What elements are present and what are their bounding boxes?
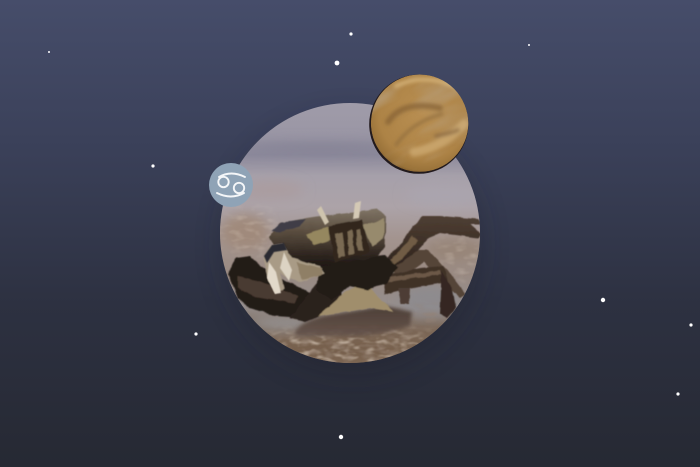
right legs	[392, 250, 466, 298]
wet reflection	[294, 306, 412, 336]
rear left claw	[228, 256, 318, 318]
crab photo circle	[215, 103, 485, 365]
sand speckle, lower and side areas	[230, 213, 272, 250]
claw highlights and eye stalks	[264, 201, 361, 294]
carapace	[269, 209, 386, 266]
planet: Venus	[369, 74, 468, 174]
shadow under photo	[222, 115, 482, 375]
right claw arm	[387, 215, 480, 266]
front claw	[263, 244, 324, 294]
cloud bands	[388, 79, 464, 152]
underside	[318, 282, 394, 316]
crab body group	[228, 209, 483, 322]
badge: Cancer zodiac sign	[209, 163, 253, 207]
blurred sand tones	[221, 142, 485, 364]
